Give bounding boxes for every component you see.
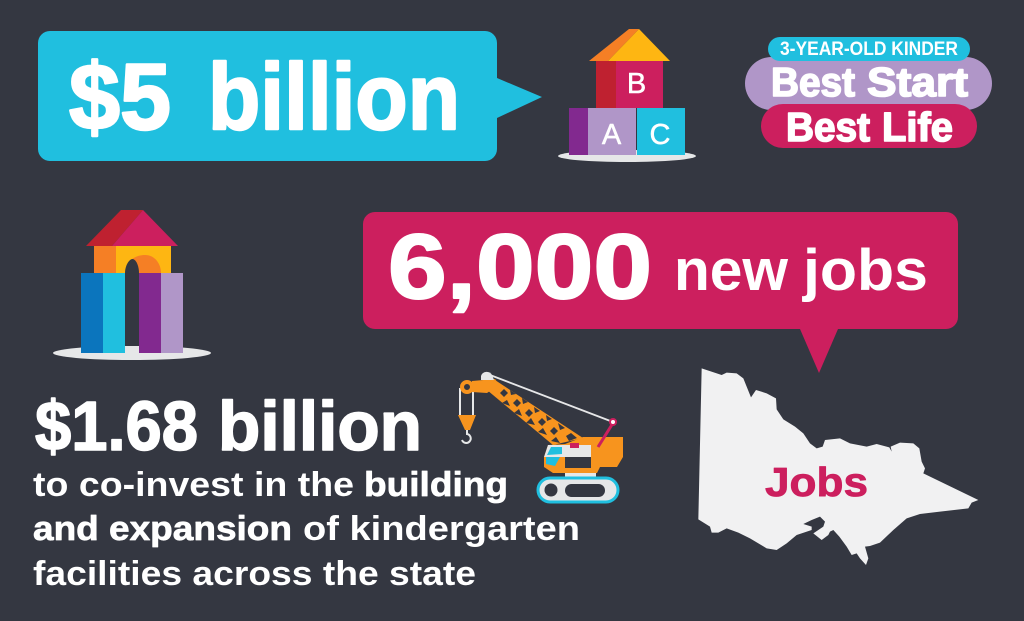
- logo: Best Start Best Life: Life: [882, 104, 953, 150]
- icon: crane: [458, 372, 623, 502]
- text block: description: of kindergarten: [303, 510, 580, 548]
- icon: alphabet blocks: B: [627, 68, 646, 100]
- map: Victoria with Jobs label: Jobs: [765, 459, 868, 505]
- heading: $1.68 billion: [35, 387, 422, 465]
- callout: 6,000 new jobs: jobs: [802, 238, 928, 303]
- text block: description: [33, 466, 580, 593]
- callout: 6,000 new jobs: new: [674, 238, 789, 303]
- icon: alphabet blocks: C: [650, 119, 670, 151]
- icon: alphabet blocks: [558, 29, 696, 162]
- icon: alphabet blocks: A: [602, 119, 622, 151]
- logo: Best Start Best Life: [745, 37, 992, 150]
- callout: $5 billion: [38, 31, 542, 161]
- map: Victoria with Jobs label: [698, 368, 978, 565]
- logo: Best Start Best Life: Best: [771, 59, 855, 105]
- logo: Best Start Best Life: Start: [867, 59, 968, 105]
- text block: description: facilities across the state: [33, 555, 476, 593]
- logo: Best Start Best Life: 3-YEAR-OLD KINDER: [780, 39, 958, 60]
- text block: description: building: [364, 466, 508, 504]
- heading: $1.68 billion: $1.68: [35, 387, 198, 465]
- text block: description: to co-invest in the: [33, 466, 354, 504]
- heading: $1.68 billion: billion: [218, 387, 422, 465]
- callout: 6,000 new jobs: [363, 212, 958, 373]
- text block: description: and expansion: [33, 510, 292, 548]
- logo: Best Start Best Life: Best: [786, 104, 870, 150]
- callout: 6,000 new jobs: 6,000: [388, 216, 652, 318]
- icon: block archway: [53, 210, 211, 360]
- callout: $5 billion: $5: [69, 44, 171, 149]
- callout: $5 billion: billion: [208, 44, 460, 149]
